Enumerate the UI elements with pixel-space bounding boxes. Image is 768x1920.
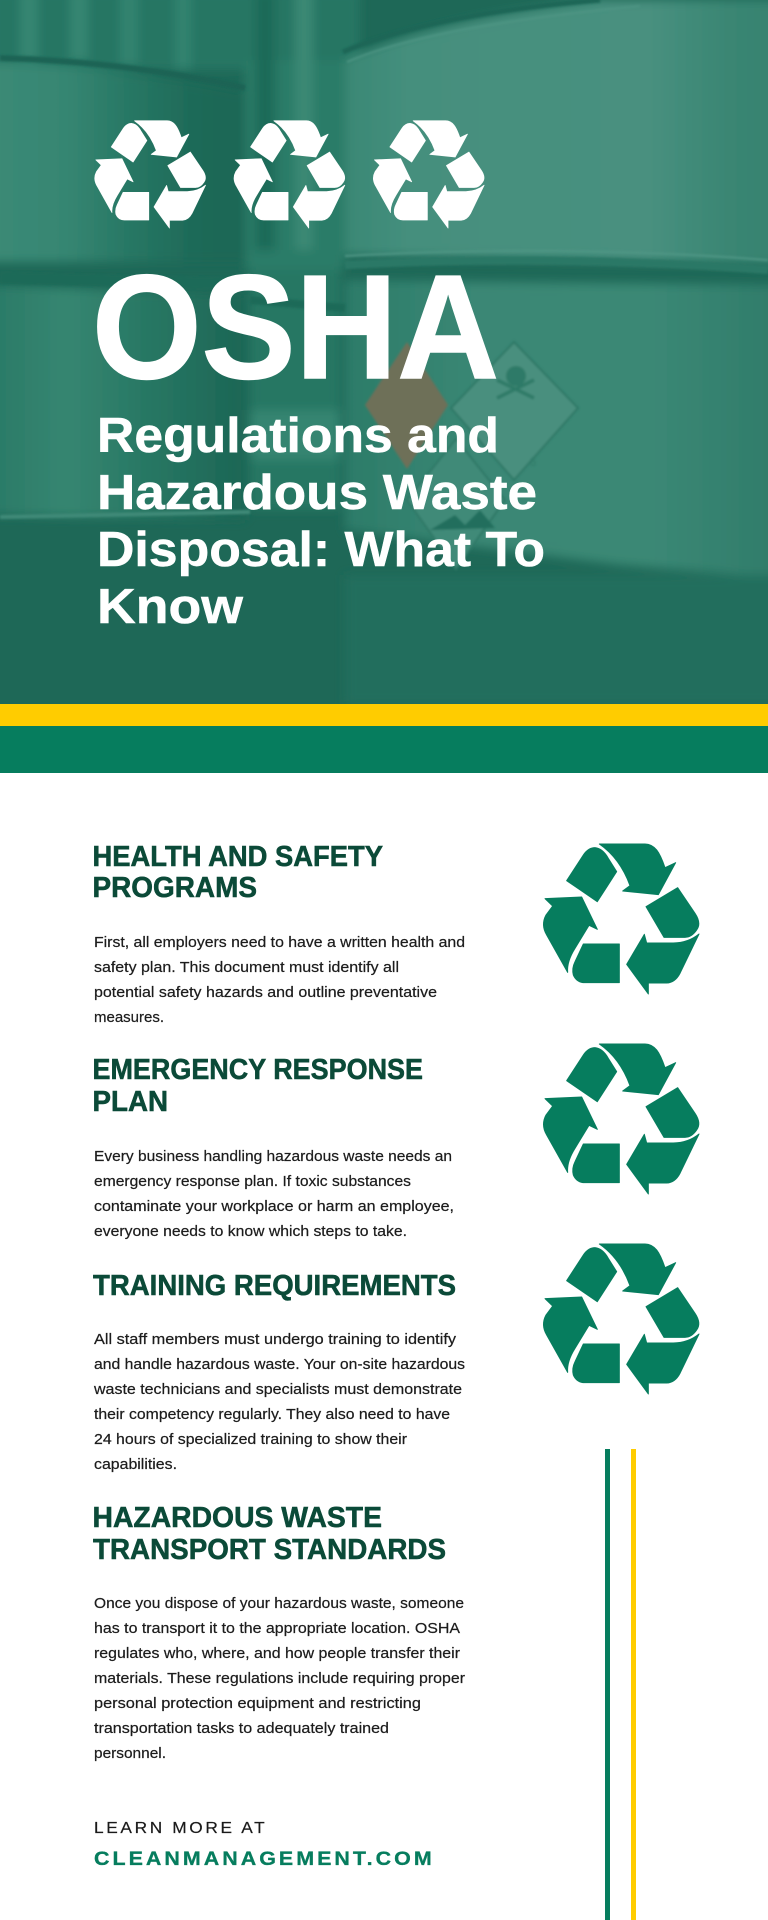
body text bbox=[94, 1595, 465, 1762]
subtitle: Disposal: What To bbox=[97, 522, 545, 577]
section: health and safety programs bbox=[92, 841, 465, 1026]
heading bbox=[92, 1502, 446, 1566]
heading: HAZARDOUS WASTE bbox=[92, 1502, 382, 1534]
body text bbox=[94, 1148, 454, 1240]
panel: hero photo background of chemical drums: 6 bbox=[530, 455, 537, 469]
body text: capabilities. bbox=[94, 1456, 177, 1473]
orange hazard diamond bbox=[365, 342, 448, 469]
band: green stripe bbox=[0, 726, 768, 773]
body text: Once you dispose of your hazardous waste, someone bbox=[94, 1595, 464, 1612]
body text: contaminate your workplace or harm an employee, bbox=[94, 1198, 454, 1215]
icon: green recycle symbol 3 bbox=[543, 1244, 699, 1394]
heading bbox=[92, 841, 383, 904]
section: hazardous waste transport standards bbox=[92, 1502, 465, 1762]
body text: All staff members must undergo training to identify bbox=[94, 1331, 457, 1348]
subtitle: Hazardous Waste bbox=[97, 465, 537, 520]
left drum upper bbox=[0, 62, 245, 262]
body text: measures. bbox=[94, 1009, 164, 1026]
body text: has to transport it to the appropriate location. OSHA bbox=[94, 1620, 460, 1637]
subtitle: Regulations and bbox=[97, 408, 499, 463]
skull hazard diamond bbox=[451, 342, 578, 480]
body text: 24 hours of specialized training to show their bbox=[94, 1431, 407, 1448]
body text: personal protection equipment and restricting bbox=[94, 1695, 421, 1712]
vertical yellow line bbox=[631, 1449, 636, 1920]
body text: everyone needs to know which steps to take. bbox=[94, 1223, 407, 1240]
body text: their competency regularly. They also need to have bbox=[94, 1406, 450, 1423]
section: emergency response plan bbox=[92, 1054, 454, 1240]
body text: waste technicians and specialists must demonstrate bbox=[93, 1381, 462, 1398]
body text: Every business handling hazardous waste needs an bbox=[94, 1148, 452, 1165]
left drum rim bbox=[0, 58, 245, 88]
skull mark bbox=[506, 366, 526, 386]
footer: call to action bbox=[94, 1819, 432, 1870]
left drum lower bbox=[0, 285, 245, 520]
website: CLEANMANAGEMENT.COM bbox=[94, 1848, 432, 1870]
body text: emergency response plan. If toxic substances bbox=[94, 1173, 411, 1190]
heading: HEALTH AND SAFETY bbox=[92, 841, 383, 873]
body text: and handle hazardous waste. Your on-site hazardous bbox=[94, 1356, 465, 1373]
heading: EMERGENCY RESPONSE bbox=[92, 1054, 423, 1086]
wall behind the drums bbox=[0, 0, 360, 70]
heading bbox=[92, 1054, 423, 1118]
ridges bbox=[0, 278, 250, 284]
panel: hero photo background of chemical drums bbox=[0, 0, 768, 705]
subtitle: Know bbox=[97, 579, 244, 634]
environment hazard diamond bbox=[407, 439, 505, 569]
title: OSHA: OSHA bbox=[92, 245, 499, 410]
body text: potential safety hazards and outline preventative bbox=[94, 984, 437, 1001]
icon: white recycle symbol 1 bbox=[95, 121, 206, 228]
right drum lower bbox=[345, 280, 768, 578]
body text: safety plan. This document must identify all bbox=[94, 959, 399, 976]
heading: TRANSPORT STANDARDS bbox=[93, 1534, 446, 1566]
heading: PROGRAMS bbox=[92, 872, 257, 904]
vertical green line bbox=[605, 1449, 610, 1920]
body text: transportation tasks to adequately trained bbox=[94, 1720, 389, 1737]
icon: green recycle symbol 2 bbox=[543, 1044, 699, 1194]
heading: TRAINING REQUIREMENTS bbox=[93, 1270, 456, 1302]
icon: white recycle symbol 3 bbox=[373, 121, 484, 228]
body text: personnel. bbox=[94, 1745, 166, 1762]
subtitle bbox=[97, 408, 545, 634]
body text: First, all employers need to have a written health and bbox=[94, 934, 465, 951]
icon: green recycle symbol 1 bbox=[543, 844, 699, 994]
heading: PLAN bbox=[92, 1086, 168, 1118]
icon: white recycle symbol 2 bbox=[234, 121, 345, 228]
band: yellow stripe bbox=[0, 704, 768, 726]
body text bbox=[94, 934, 465, 1026]
body text bbox=[93, 1331, 465, 1473]
right drum rim bbox=[343, 0, 600, 52]
section: training requirements bbox=[93, 1270, 465, 1473]
body text: regulates who, where, and how people transfer their bbox=[94, 1645, 460, 1662]
body text: materials. These regulations include requiring proper bbox=[94, 1670, 465, 1687]
learn more label: LEARN MORE AT bbox=[94, 1819, 265, 1837]
right drum upper bbox=[345, 0, 768, 265]
